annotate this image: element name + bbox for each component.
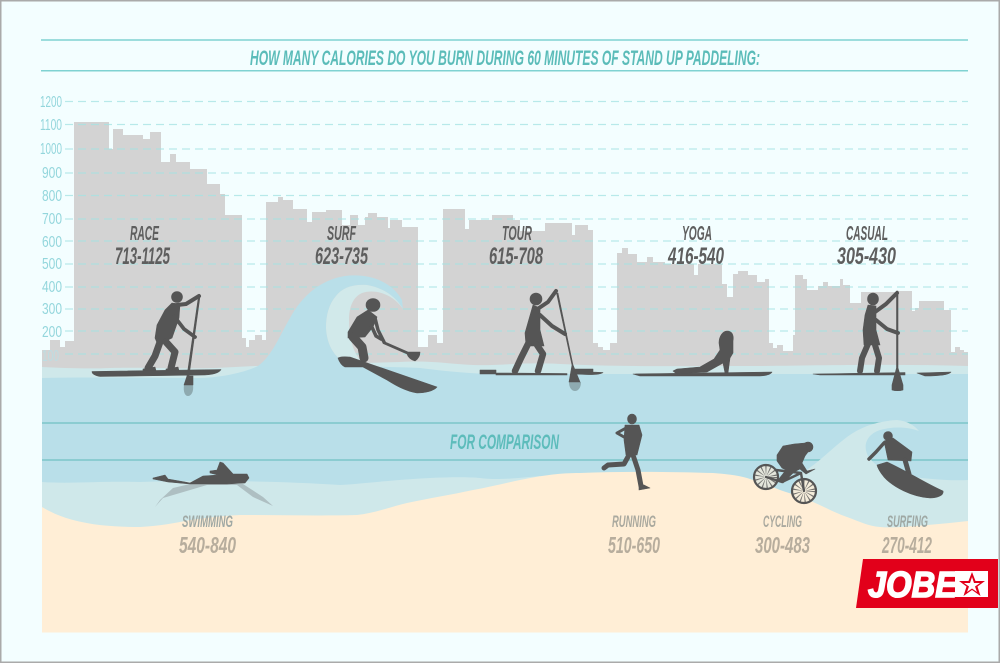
y axis labels: 900 [42, 165, 62, 182]
y axis labels: 300 [42, 301, 62, 318]
bars: tour [443, 209, 617, 372]
label: swimming [179, 512, 236, 558]
icon: surfer [869, 432, 943, 498]
label: swimming: 540-840 [179, 532, 236, 558]
icon: cyclist [754, 442, 816, 503]
label: running: 510-650 [608, 532, 660, 558]
label: surfing: SURFING [887, 512, 928, 531]
y axis labels: 600 [42, 234, 62, 251]
y axis labels: 400 [42, 279, 62, 296]
label: tour: 615-708 [489, 243, 543, 270]
label: surf: SURF [327, 223, 356, 245]
icon: tour paddler [480, 291, 603, 391]
label: surfing [881, 512, 932, 558]
logo: Jobe: JOBE [868, 564, 958, 605]
label: swimming: SWIMMING [182, 512, 233, 531]
heading: for comparison: FOR COMPARISON [450, 431, 559, 454]
bars: yoga [617, 248, 795, 372]
label: casual: 305-430 [837, 243, 896, 270]
bars: surf [266, 197, 443, 372]
label: tour: TOUR [502, 223, 532, 245]
y axis labels: 100 [42, 348, 59, 365]
y axis labels: 700 [42, 211, 62, 228]
y axis labels: 1000 [40, 141, 62, 158]
label: race: RACE [130, 223, 159, 245]
label: casual: CASUAL [846, 223, 888, 245]
label: surf [315, 223, 368, 270]
y axis labels: 1200 [40, 94, 62, 111]
bars: race [42, 122, 267, 372]
label: surfing: 270-412 [881, 532, 932, 558]
label: surf: 623-735 [315, 243, 368, 270]
water [42, 275, 968, 495]
icon: runner [604, 414, 650, 490]
y axis labels: 500 [42, 256, 62, 273]
icon: swimmer [153, 462, 273, 507]
bars: casual [793, 275, 968, 372]
label: cycling: 300-483 [755, 532, 810, 558]
y axis labels [40, 94, 62, 365]
label: cycling: CYCLING [763, 512, 802, 531]
y axis labels: 200 [42, 324, 62, 341]
label: running: RUNNING [612, 512, 656, 531]
grid lines [65, 102, 968, 354]
label: yoga: YOGA [682, 223, 712, 245]
comparison band lines [42, 423, 968, 460]
label: yoga: 416-540 [667, 243, 724, 270]
y axis labels: 1100 [40, 117, 62, 134]
icon: surf paddler [338, 298, 437, 393]
label: race [115, 223, 170, 270]
icon: casual paddler [813, 291, 951, 391]
icon: yoga pose [633, 331, 772, 376]
icon: race paddler [92, 292, 221, 396]
label: casual [837, 223, 896, 270]
shallow foam band [42, 361, 968, 385]
bar chart: calorie skyline [42, 122, 968, 372]
label: race: 713-1125 [115, 243, 170, 270]
wave crest foam [326, 285, 403, 362]
y axis labels: 800 [42, 188, 62, 205]
label: yoga [667, 223, 724, 270]
label: tour [489, 223, 543, 270]
logo: Jobe [856, 559, 998, 608]
wave: comparison surfing [780, 420, 968, 540]
shallow water: left [42, 476, 560, 540]
sand [42, 472, 968, 632]
label: running [608, 512, 660, 558]
label: cycling [755, 512, 810, 558]
